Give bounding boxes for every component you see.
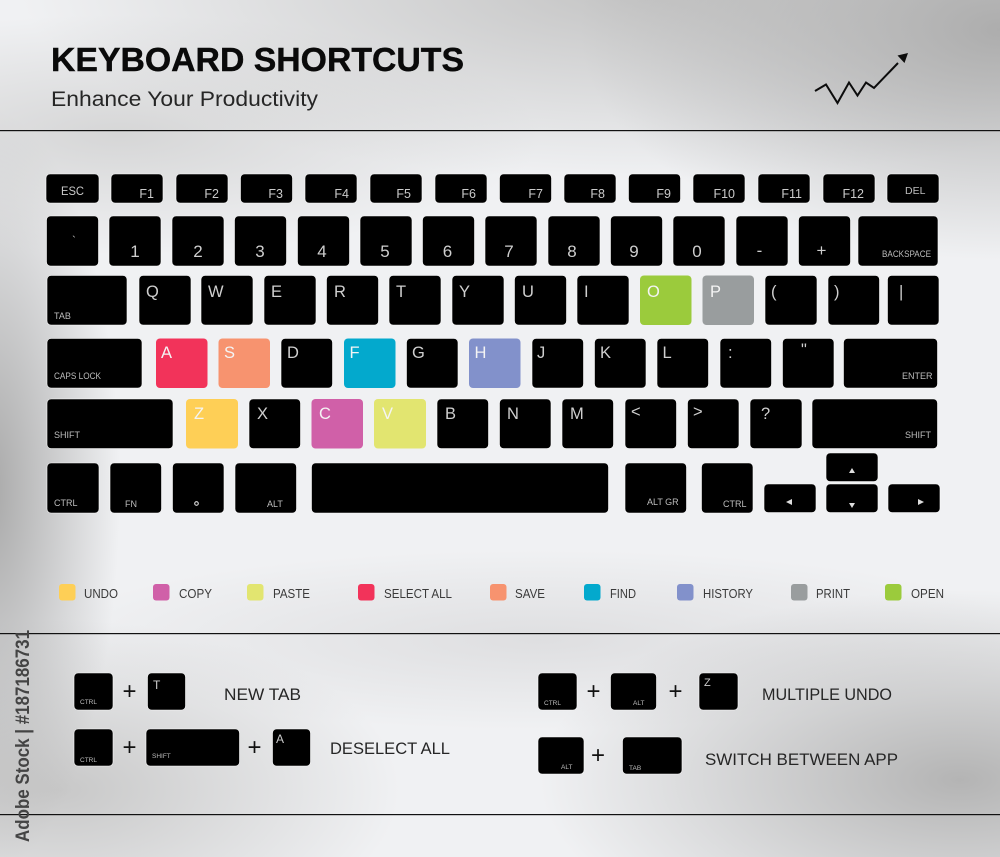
key: question mark: ? — [761, 405, 770, 423]
key: 4 — [298, 216, 350, 266]
key: F3: F3 — [268, 187, 283, 201]
key: F9 — [628, 174, 680, 203]
key: F10 — [693, 174, 745, 203]
modifier key row — [47, 463, 753, 513]
key: U — [514, 276, 566, 325]
key: 6 — [422, 216, 474, 266]
key: arrow down — [826, 484, 878, 512]
key: minus — [736, 216, 788, 266]
legend: save — [490, 584, 545, 601]
number key row — [46, 216, 938, 266]
key: A (select all) — [156, 338, 208, 388]
key: quote: " — [801, 341, 807, 359]
shortcut: switch between app — [538, 737, 898, 774]
shortcut: deselect all: A — [276, 732, 284, 746]
shortcut: multiple undo: ALT — [633, 700, 644, 707]
key: Q: Q — [146, 283, 159, 301]
key: quote — [782, 338, 834, 388]
key: backtick — [46, 216, 98, 266]
legend: history: HISTORY — [703, 587, 754, 601]
key: F5 — [370, 174, 422, 203]
panel: shortcut combinations — [74, 673, 898, 774]
shortcut: switch between app: SWITCH BETWEEN APP — [705, 750, 898, 769]
key: F1 — [111, 174, 163, 203]
key: FN — [110, 463, 162, 513]
key: O (open): O — [647, 283, 660, 301]
key: right parenthesis — [828, 276, 880, 325]
key: ENTER — [844, 338, 938, 388]
icon: rising trend arrow — [815, 53, 908, 103]
key: R — [326, 276, 378, 325]
key: F5: F5 — [396, 187, 411, 201]
shortcut: deselect all: + — [122, 734, 137, 761]
key: ALT GR — [625, 463, 686, 513]
shortcut: multiple undo: CTRL — [544, 700, 561, 707]
key: right SHIFT: SHIFT — [905, 430, 932, 440]
key: FN: FN — [125, 499, 137, 509]
key: ALT: ALT — [267, 499, 283, 509]
key: left SHIFT — [47, 399, 173, 448]
key: L — [657, 338, 708, 388]
legend: paste: PASTE — [273, 587, 310, 601]
key: C (copy): C — [319, 405, 331, 423]
key: arrow left — [764, 484, 816, 512]
key: U: U — [522, 283, 534, 301]
key: question mark — [750, 399, 802, 448]
key: T: T — [396, 283, 406, 301]
key: L: L — [662, 344, 672, 362]
shortcut: switch between app: TAB — [629, 765, 641, 772]
key: greater than: > — [693, 403, 703, 421]
key: E: E — [271, 283, 282, 301]
vertical stock credit: Adobe Stock | #187186731 — [13, 630, 34, 842]
key: plus: + — [817, 241, 827, 260]
key: F8: F8 — [590, 187, 605, 201]
QWERTY key row — [47, 276, 939, 325]
key: ENTER: ENTER — [902, 371, 933, 381]
shortcut: switch between app: ALT — [561, 764, 572, 771]
key: I: I — [584, 283, 589, 301]
shortcut: new tab: NEW TAB — [224, 685, 301, 704]
legend: select all — [358, 584, 452, 601]
key: F7: F7 — [528, 187, 543, 201]
shortcut: deselect all: CTRL — [80, 757, 97, 764]
shortcut: multiple undo: Z — [704, 677, 711, 689]
keyboard — [46, 174, 940, 513]
key: 3: 3 — [255, 242, 265, 261]
key: right parenthesis: ) — [834, 283, 840, 301]
key: W: W — [208, 283, 224, 301]
key: P (print) — [702, 276, 754, 325]
key: N — [500, 399, 551, 448]
key: 5 — [360, 216, 412, 266]
key: I — [577, 276, 629, 325]
key: ESC: ESC — [61, 184, 84, 198]
legend: print — [791, 584, 850, 601]
key: G — [406, 338, 458, 388]
legend: undo: UNDO — [84, 587, 118, 601]
key: DEL — [887, 174, 939, 203]
key: C (copy) — [312, 399, 363, 448]
key: left CTRL — [47, 463, 99, 513]
key: CAPS LOCK — [47, 338, 142, 388]
key: M: M — [570, 405, 584, 423]
shortcut: new tab: + — [122, 678, 137, 705]
key: F (find): F — [350, 344, 360, 362]
key: V (paste) — [374, 399, 426, 448]
key: X — [249, 399, 300, 448]
key: pipe: | — [899, 283, 903, 301]
key: E — [264, 276, 316, 325]
key: F10: F10 — [713, 187, 735, 201]
legend: history — [677, 584, 754, 601]
key: F1: F1 — [139, 187, 154, 201]
bottom letter key row — [47, 399, 938, 448]
arrow keys — [764, 453, 940, 512]
key: Y: Y — [459, 283, 470, 301]
key: F6: F6 — [461, 187, 476, 201]
shortcut: switch between app: + — [591, 742, 605, 769]
key: BACKSPACE: BACKSPACE — [882, 249, 931, 259]
legend: save: SAVE — [515, 587, 545, 601]
shortcut: deselect all — [74, 729, 450, 766]
shortcut: new tab: T — [153, 678, 161, 692]
legend: print: PRINT — [816, 587, 850, 601]
legend: undo — [59, 584, 118, 601]
key: G: G — [412, 344, 425, 362]
key: F6 — [435, 174, 487, 203]
key: V (paste): V — [382, 405, 393, 423]
key: 8 — [548, 216, 600, 266]
legend: find: FIND — [610, 587, 636, 601]
key: 7: 7 — [504, 242, 514, 261]
key: 2 — [172, 216, 224, 266]
key: F2: F2 — [204, 187, 219, 201]
key: 9 — [610, 216, 662, 266]
key: F4: F4 — [334, 187, 349, 201]
key: P (print): P — [710, 283, 721, 301]
key: 0: 0 — [692, 242, 702, 261]
legend: copy — [153, 584, 213, 601]
shortcut: multiple undo: + — [586, 678, 601, 705]
shortcut: multiple undo: + — [668, 678, 683, 705]
key: T — [389, 276, 441, 325]
key: right CTRL: CTRL — [723, 499, 747, 509]
key: K: K — [600, 344, 611, 362]
key: M — [562, 399, 614, 448]
key: left SHIFT: SHIFT — [54, 430, 81, 440]
key: 4: 4 — [317, 242, 327, 261]
key: BACKSPACE — [858, 216, 938, 266]
key: R: R — [334, 283, 346, 301]
key: greater than — [688, 399, 739, 448]
key: B: B — [445, 405, 456, 423]
key: 9: 9 — [629, 242, 639, 261]
key: 5: 5 — [380, 242, 390, 261]
key: backtick: ` — [72, 235, 76, 247]
shortcut: new tab: CTRL — [80, 699, 97, 706]
key: A (select all): A — [161, 344, 172, 362]
key: 0 — [673, 216, 725, 266]
key: F12 — [823, 174, 875, 203]
key: N: N — [507, 405, 519, 423]
key: F2 — [176, 174, 228, 203]
key: S (save) — [218, 338, 270, 388]
key: 7 — [485, 216, 537, 266]
legend: paste — [247, 584, 310, 601]
key: F9: F9 — [656, 187, 671, 201]
legend — [59, 584, 944, 601]
key: F4 — [305, 174, 357, 203]
key: DEL: DEL — [905, 185, 926, 197]
key: 8: 8 — [567, 242, 577, 261]
key: ESC — [46, 174, 99, 203]
key: pipe — [888, 276, 939, 325]
legend: find — [584, 584, 636, 601]
key: left CTRL: CTRL — [54, 498, 78, 508]
key: H (history) — [469, 338, 520, 388]
legend: select all: SELECT ALL — [384, 587, 452, 601]
key: K — [594, 338, 646, 388]
key: colon — [720, 338, 772, 388]
key: right SHIFT — [812, 399, 938, 448]
shortcut: new tab — [74, 673, 301, 710]
key: Z (undo): Z — [194, 405, 204, 423]
subtitle: Enhance Your Productivity — [51, 88, 319, 111]
key: TAB — [47, 276, 127, 325]
shortcut: deselect all: DESELECT ALL — [330, 739, 450, 758]
key: space bar — [312, 463, 608, 513]
key: option circle — [172, 463, 224, 513]
home key row — [47, 338, 938, 388]
key: arrow up — [826, 453, 878, 482]
key: colon: : — [728, 344, 733, 362]
key: ALT — [235, 463, 296, 513]
key: F11 — [758, 174, 810, 203]
key: plus — [798, 216, 850, 266]
key: F12: F12 — [842, 187, 864, 201]
key: D: D — [287, 344, 299, 362]
key: W — [201, 276, 253, 325]
key: Y — [452, 276, 504, 325]
key: 1: 1 — [130, 242, 140, 261]
key: J: J — [537, 344, 545, 362]
key: 3 — [234, 216, 286, 266]
key: X: X — [257, 405, 268, 423]
key: less than — [625, 399, 676, 448]
key: left parenthesis: ( — [771, 283, 777, 301]
key: arrow right — [888, 484, 940, 512]
key: J — [532, 338, 584, 388]
key: 6: 6 — [443, 242, 452, 261]
key: F7 — [500, 174, 552, 203]
key: B — [437, 399, 488, 448]
key: CAPS LOCK: CAPS LOCK — [54, 371, 101, 381]
key: S (save): S — [224, 344, 235, 362]
key: left parenthesis — [765, 276, 817, 325]
key: right CTRL — [702, 463, 753, 513]
key: F11: F11 — [781, 187, 802, 201]
key: TAB: TAB — [54, 311, 71, 321]
key: F8 — [564, 174, 616, 203]
key: less than: < — [631, 403, 641, 421]
key: Q — [139, 276, 191, 325]
key: F3 — [240, 174, 292, 203]
legend: copy: COPY — [179, 587, 213, 601]
shortcut: deselect all: + — [247, 734, 262, 761]
key: minus: - — [757, 241, 762, 260]
legend: open: OPEN — [911, 587, 944, 601]
key: ALT GR: ALT GR — [647, 497, 679, 507]
key: Z (undo) — [186, 399, 238, 448]
function key row — [46, 174, 939, 203]
title: KEYBOARD SHORTCUTS — [51, 41, 464, 78]
shortcut: deselect all: SHIFT — [152, 753, 171, 760]
key: 1 — [109, 216, 161, 266]
legend: open — [885, 584, 944, 601]
key: H (history): H — [474, 344, 486, 362]
shortcut: multiple undo: MULTIPLE UNDO — [762, 685, 892, 704]
key: D — [281, 338, 332, 388]
shortcut: multiple undo — [538, 673, 892, 710]
key: F (find) — [344, 338, 396, 388]
key: 2: 2 — [193, 242, 203, 261]
key: O (open) — [640, 276, 692, 325]
